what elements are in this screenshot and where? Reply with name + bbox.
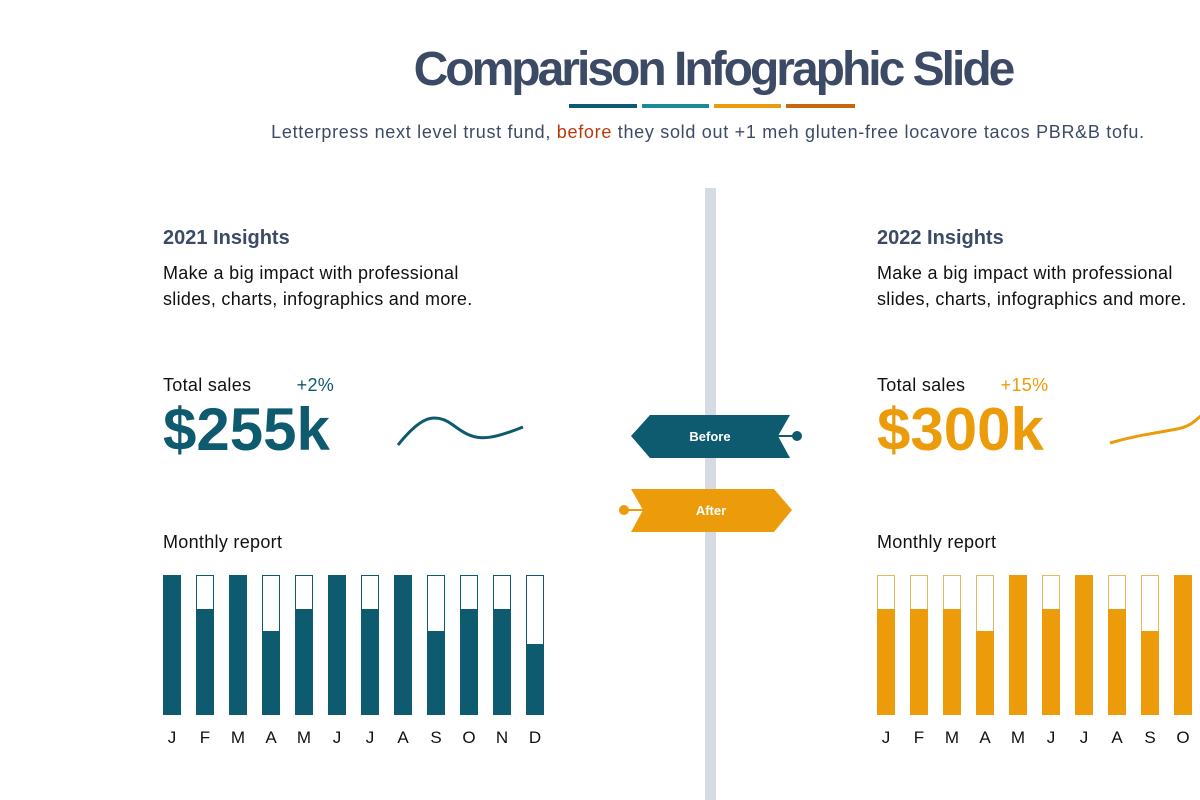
arrow: before: Before bbox=[689, 429, 731, 444]
monthly label: Monthly report bbox=[163, 532, 282, 552]
sparkline bbox=[1110, 414, 1200, 444]
month labels: F bbox=[200, 728, 210, 747]
month labels: S bbox=[430, 728, 442, 747]
month labels: J bbox=[168, 728, 176, 747]
sparkline bbox=[396, 416, 524, 446]
month labels: S bbox=[1144, 728, 1156, 747]
big number: $255k bbox=[163, 396, 330, 463]
month labels bbox=[168, 728, 541, 747]
heading 2022: 2022 Insights bbox=[877, 227, 1004, 249]
month labels: A bbox=[397, 728, 409, 747]
month labels: M bbox=[231, 728, 245, 747]
divider line bbox=[705, 188, 716, 800]
title: Comparison Infographic Slide bbox=[414, 43, 1012, 96]
month labels bbox=[882, 728, 1190, 747]
month labels: D bbox=[529, 728, 541, 747]
arrow: after: After bbox=[696, 503, 726, 518]
arrow: before bbox=[631, 415, 802, 458]
month labels: O bbox=[1176, 728, 1190, 747]
total sales label: Total sales +15% bbox=[877, 375, 1048, 395]
month labels: A bbox=[979, 728, 991, 747]
bar chart bbox=[877, 575, 1192, 715]
monthly label: Monthly report bbox=[877, 532, 996, 552]
description: Make a big impact with professional slides, charts, infographics and more. bbox=[877, 263, 1187, 309]
arrow: after bbox=[619, 489, 792, 532]
panel: 2021 bbox=[163, 227, 544, 747]
month labels: M bbox=[297, 728, 311, 747]
month labels: A bbox=[1111, 728, 1123, 747]
panel: 2022 bbox=[877, 227, 1200, 747]
month labels: A bbox=[265, 728, 277, 747]
big number: $300k bbox=[877, 396, 1044, 463]
month labels: J bbox=[882, 728, 890, 747]
month labels: J bbox=[1080, 728, 1088, 747]
title underline bbox=[569, 104, 855, 108]
month labels: F bbox=[914, 728, 924, 747]
description: Make a big impact with professional slides, charts, infographics and more. bbox=[163, 263, 473, 309]
month labels: J bbox=[366, 728, 374, 747]
subtitle: Letterpress next level trust fund, before they sold out +1 meh gluten-free locavore tacos PBR&B tofu. bbox=[271, 122, 1145, 142]
month labels: M bbox=[1011, 728, 1025, 747]
bar chart bbox=[163, 575, 544, 715]
month labels: J bbox=[1047, 728, 1055, 747]
total sales label: Total sales +2% bbox=[163, 375, 334, 395]
month labels: N bbox=[496, 728, 508, 747]
heading 2021: 2021 Insights bbox=[163, 227, 290, 249]
month labels: O bbox=[462, 728, 476, 747]
month labels: J bbox=[333, 728, 341, 747]
month labels: M bbox=[945, 728, 959, 747]
